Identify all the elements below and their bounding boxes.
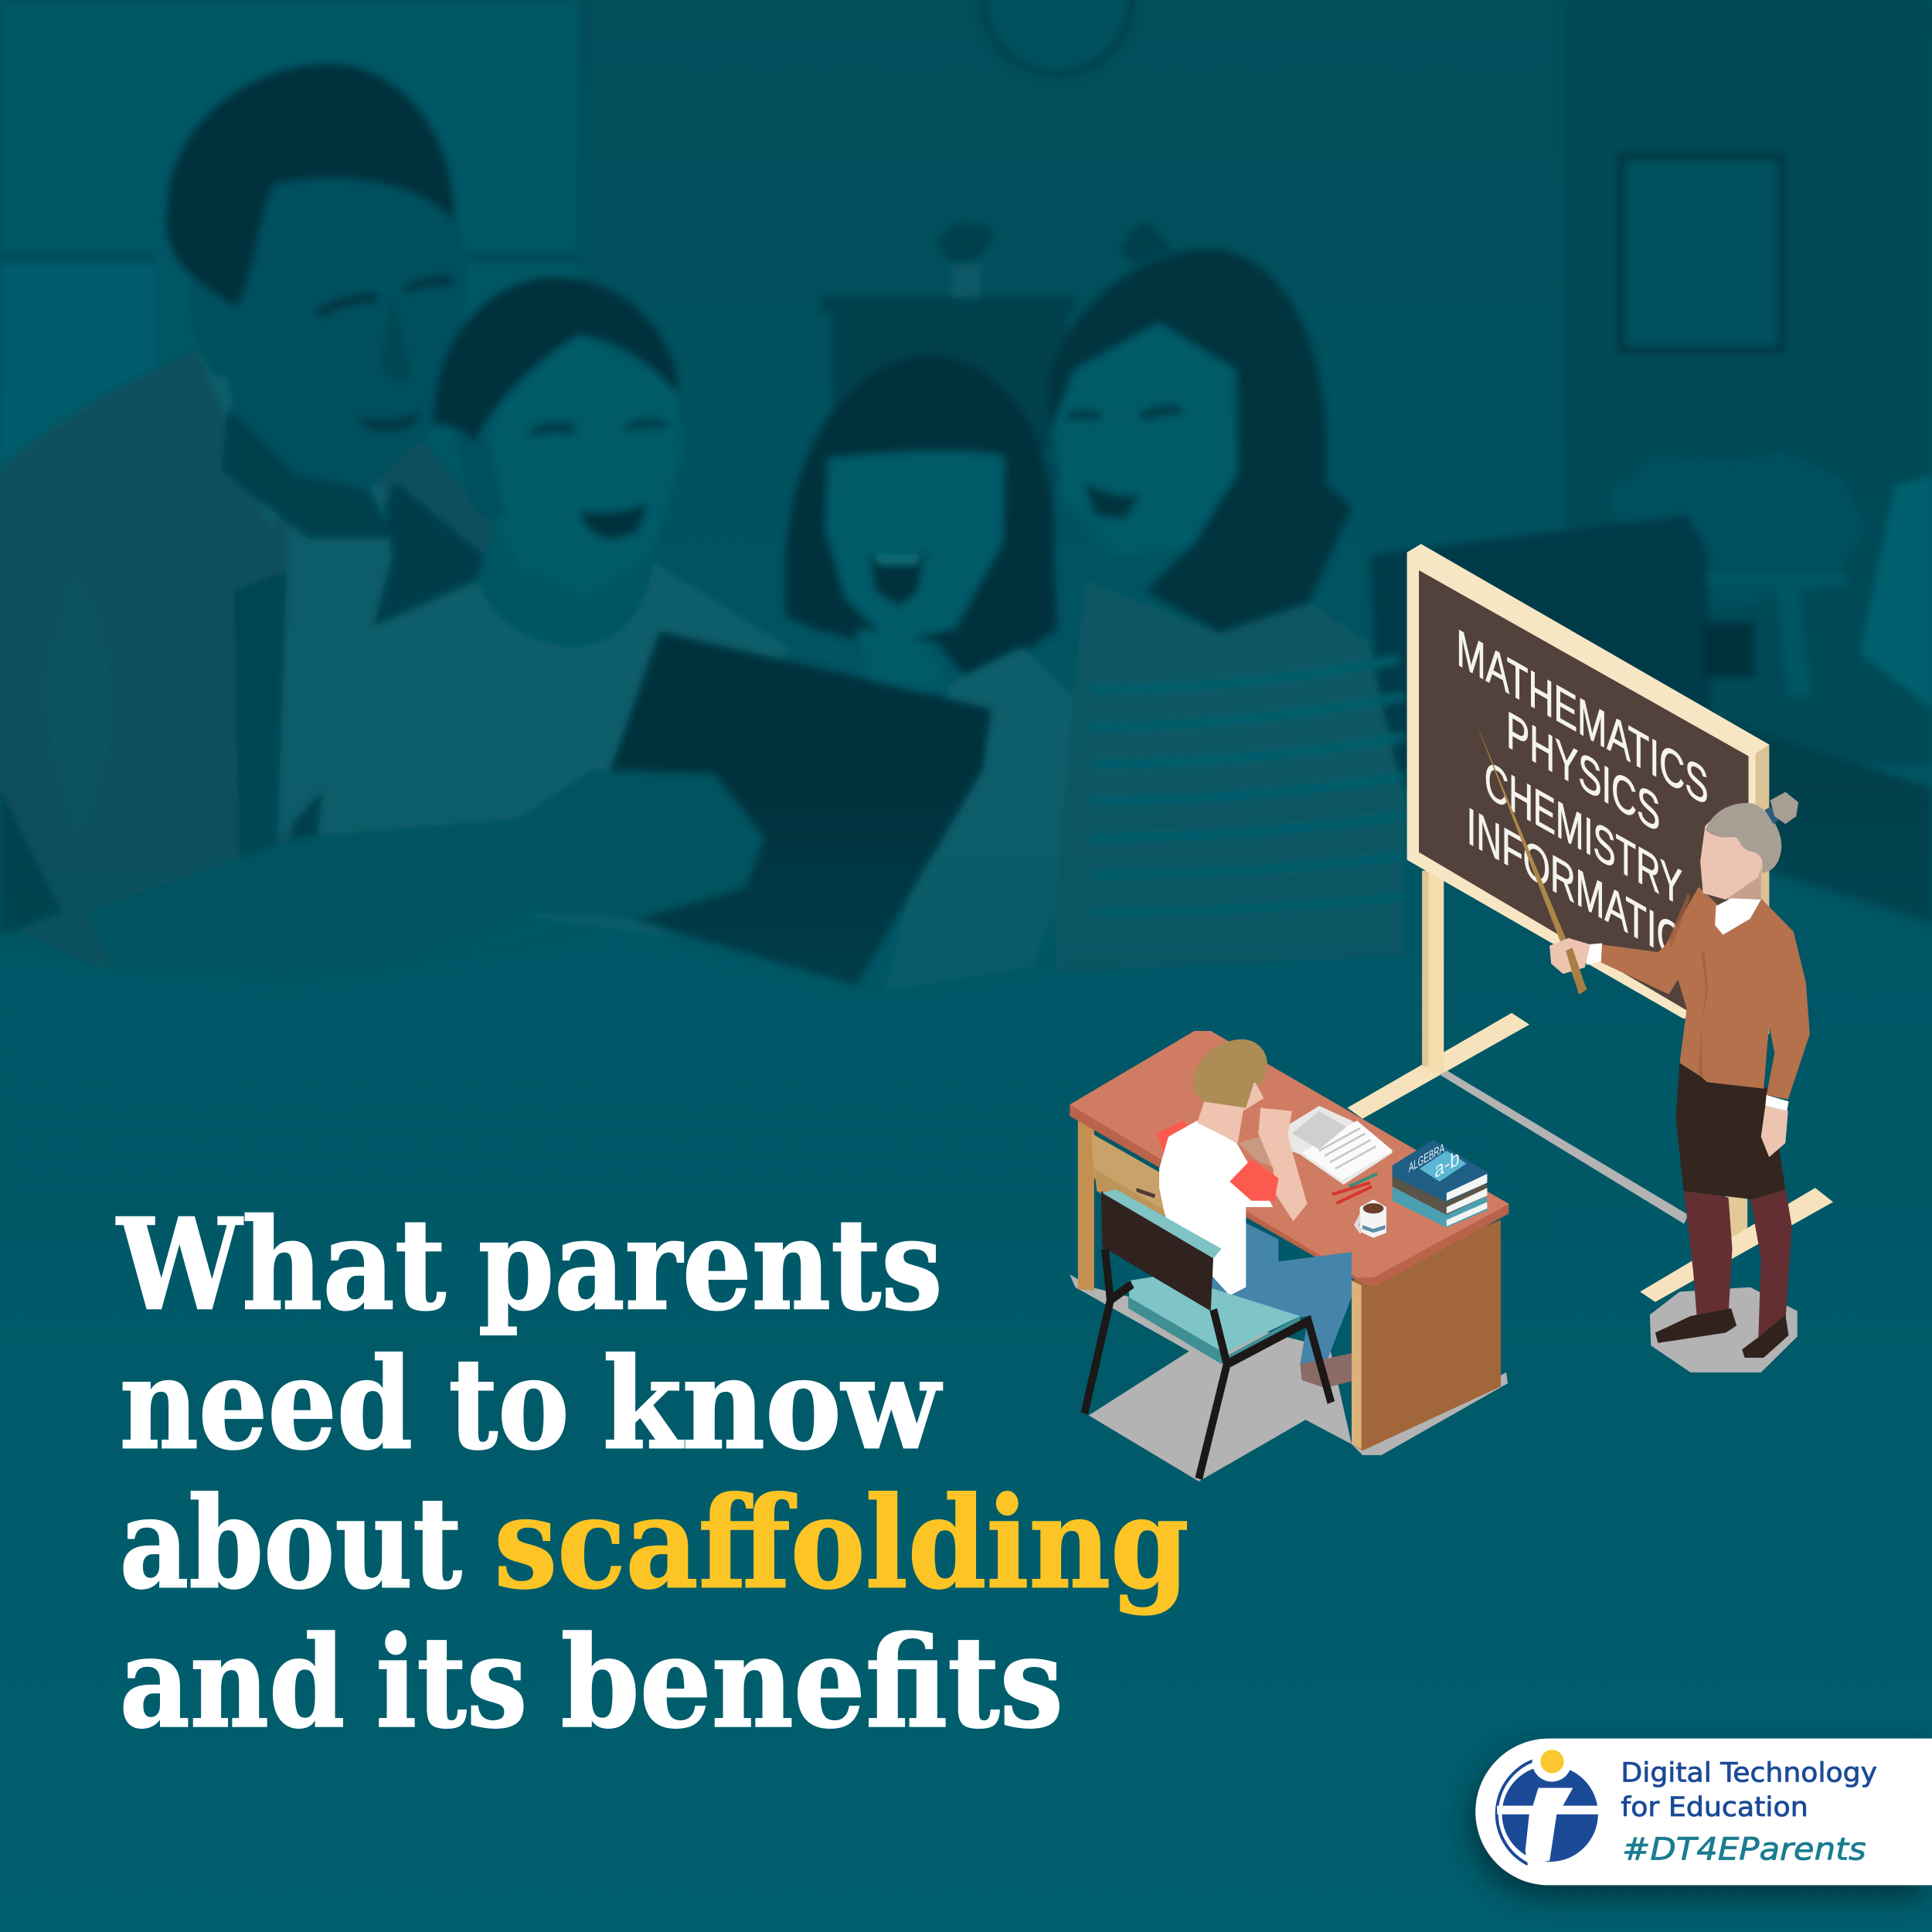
line 4: and [120, 1609, 345, 1757]
logo text: #DT4EParents [1622, 1832, 1866, 1868]
pointer stick [1476, 723, 1587, 995]
blanket [102, 955, 1403, 1011]
man [0, 63, 518, 974]
line 4: benefits [560, 1609, 1063, 1757]
picture frame [1621, 156, 1781, 350]
boy [315, 277, 788, 937]
board text: PHYSICS [1506, 699, 1660, 844]
line 4: its [376, 1609, 527, 1757]
logo text: for Education [1621, 1791, 1808, 1823]
logo panel [1475, 1739, 1932, 1885]
book titles: ALGEBRA [1409, 1141, 1444, 1175]
tablet [610, 631, 992, 986]
logo text [1621, 1757, 1877, 1868]
board text: CHEMISTRY [1485, 749, 1682, 917]
sofa [1370, 474, 1932, 924]
line 2: know [603, 1330, 943, 1478]
student [1156, 1039, 1352, 1388]
book titles [1409, 1141, 1460, 1183]
board text: INFORMATICS [1467, 796, 1705, 988]
shelf with plants [819, 220, 1173, 448]
room walls [0, 0, 1932, 764]
board text [1456, 617, 1709, 988]
girl [785, 355, 1094, 992]
pencils [1332, 1183, 1372, 1203]
line 2: need [120, 1330, 413, 1478]
open book [1264, 1106, 1393, 1185]
background photo: family with tablet [0, 0, 1932, 986]
blackboard stand [1347, 871, 1833, 1302]
line 4 [120, 1609, 1063, 1757]
line 1 [116, 1191, 943, 1338]
desk shadow [1070, 1274, 1508, 1481]
line 1: What [116, 1191, 446, 1338]
teacher [1549, 792, 1810, 1372]
logo icon [1497, 1742, 1602, 1865]
book titles: a-b [1434, 1145, 1460, 1183]
board text: MATHEMATICS [1456, 617, 1709, 817]
title [116, 1191, 1189, 1757]
logo text: Digital Technology [1621, 1757, 1877, 1788]
line 2: to [448, 1330, 570, 1478]
line 3: scaffolding [494, 1470, 1189, 1617]
line 3: about [120, 1470, 462, 1617]
illustration: teacher and student [1070, 544, 1833, 1481]
man's hand and arm [87, 770, 764, 974]
line 1: parents [478, 1191, 943, 1338]
coffee mug [1354, 1199, 1386, 1238]
desk [1070, 1031, 1509, 1451]
stack of books [1393, 1140, 1487, 1228]
blackboard [1407, 544, 1769, 1047]
line 2 [120, 1330, 943, 1478]
wall clock [983, 0, 1131, 74]
woman [1047, 249, 1405, 1035]
line 3 [120, 1470, 1189, 1617]
chair [1084, 1189, 1331, 1479]
